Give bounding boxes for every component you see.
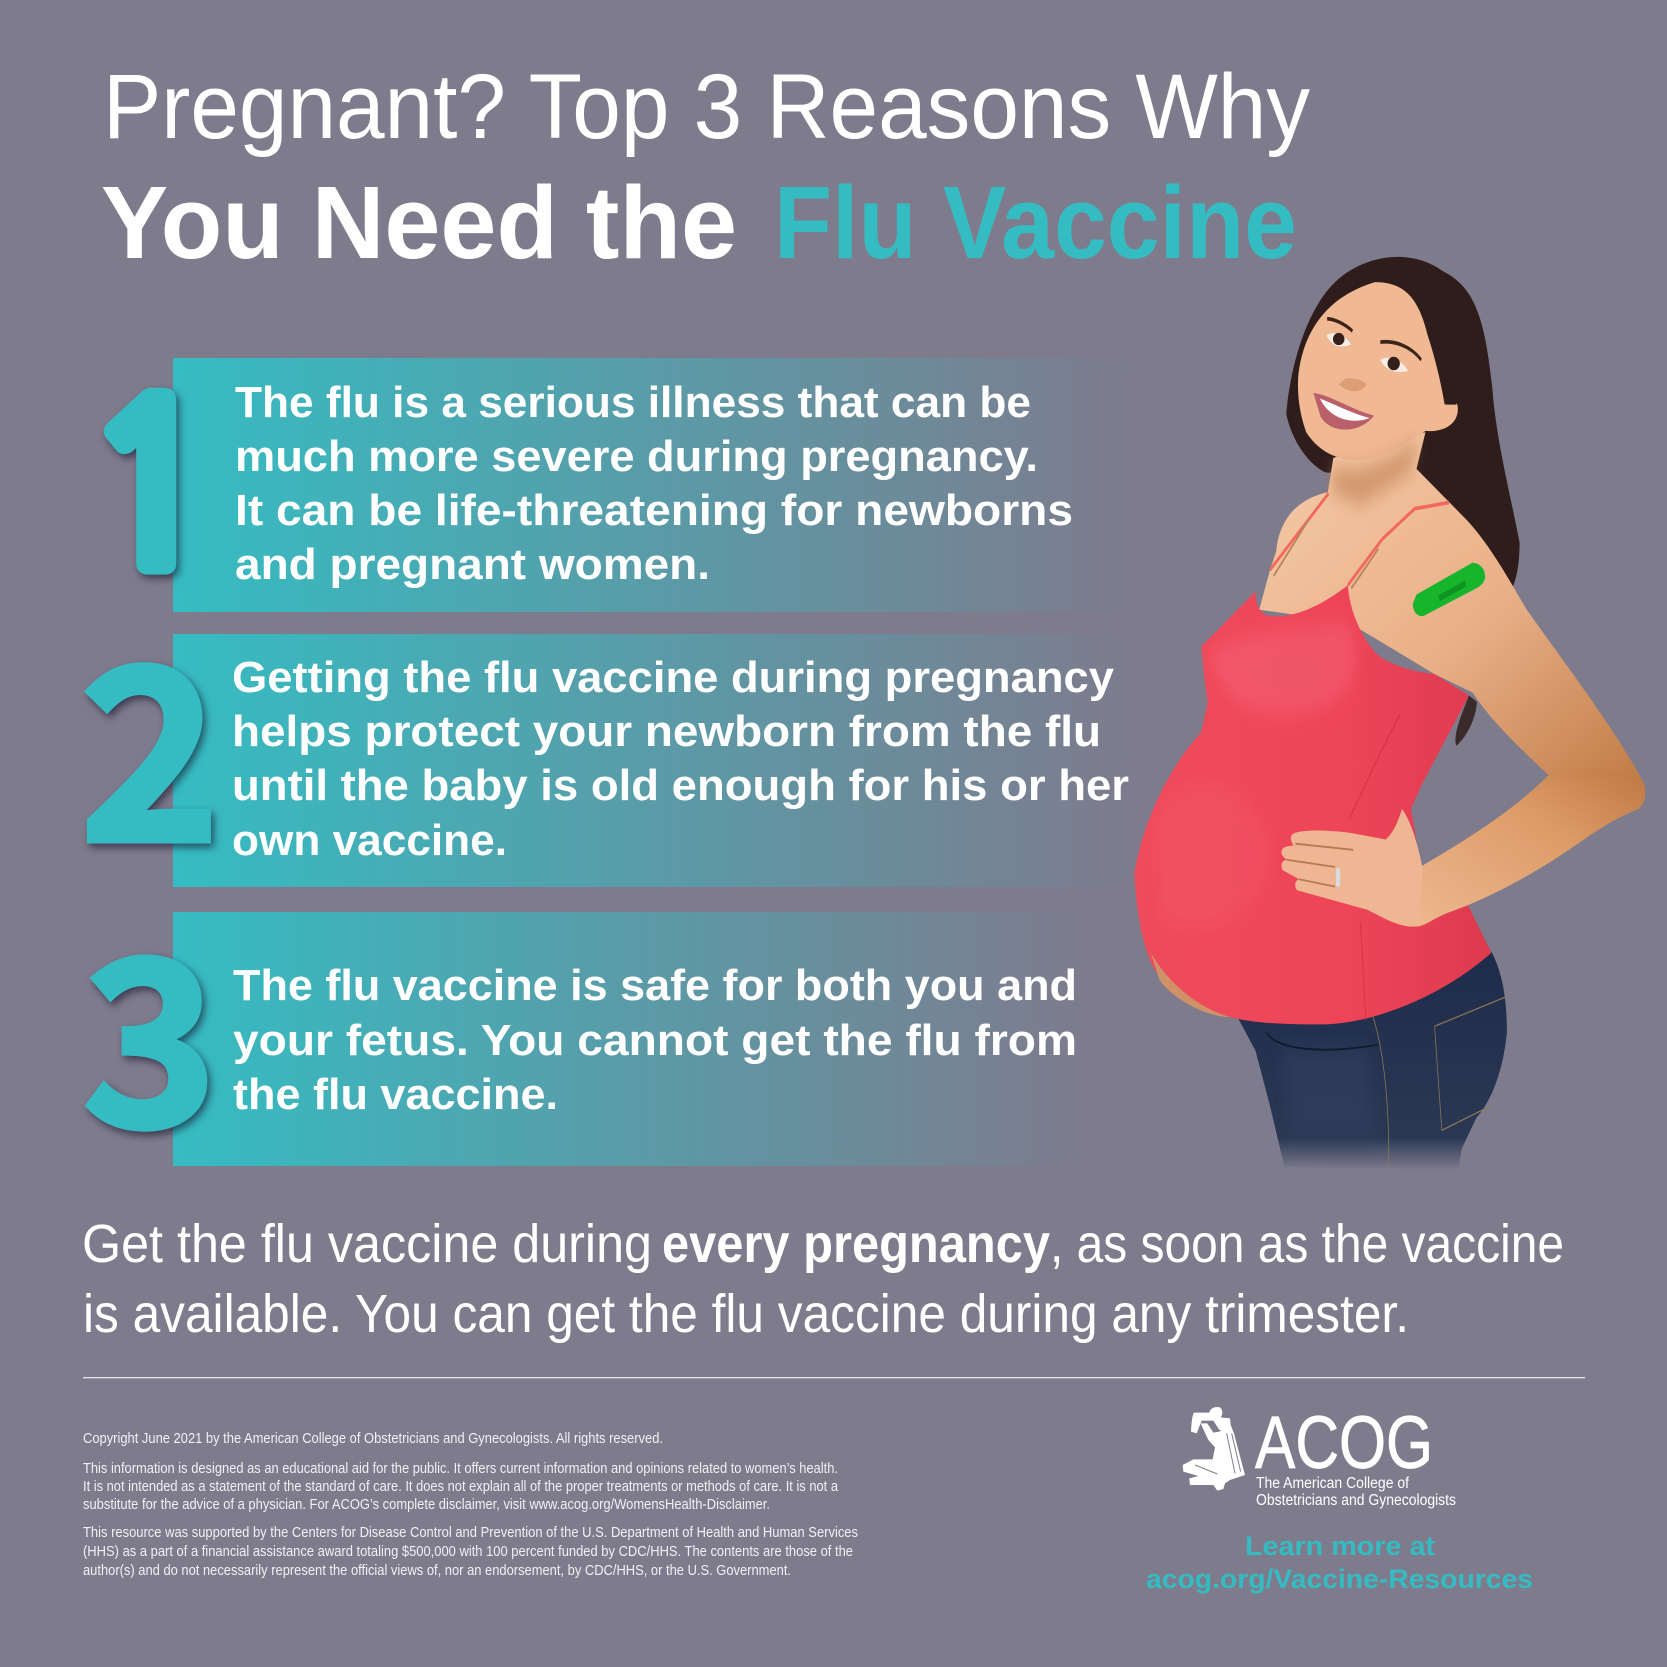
ring [1336,868,1340,887]
hand on hip [1281,809,1423,927]
reason 3 text: your fetus. You cannot get the flu from [233,1016,1077,1065]
closing message: every pregnancy [662,1214,1050,1274]
fingers [1286,844,1353,887]
call to action link: Learn more at [1245,1531,1435,1561]
bandage [1413,563,1485,616]
ACOG logo: ACOG [1255,1401,1433,1484]
call to action link [1146,1531,1533,1594]
title [101,56,1310,280]
panel: reason 1 [83,358,1135,612]
disclaimer text: Copyright June 2021 by the American College of Obstetricians and Gynecologists. All rights reserved. [83,1431,663,1447]
ACOG logo: Obstetricians and Gynecologists [1256,1492,1456,1509]
neck shade [1331,438,1418,506]
nose [1339,378,1367,391]
front hair [1415,285,1460,405]
disclaimer text: (HHS) as a part of a financial assistance award totaling $500,000 with 100 percent funded by CDC/HHS. The contents are those of the [83,1544,853,1560]
reason 2 text: Getting the flu vaccine during pregnancy [232,653,1115,702]
illustration: pregnant woman with bandage [1134,257,1645,1170]
forearm [1418,769,1645,926]
hand under belly [1151,953,1230,1017]
disclaimer text: It is not intended as a statement of the standard of care. It does not explain all of the proper treatments or methods of care. It is not a [83,1479,839,1495]
disclaimer text [83,1431,858,1579]
reason 3 text: the flu vaccine. [233,1070,558,1119]
title: You Need the [101,165,737,280]
disclaimer text: This resource was supported by the Centers for Disease Control and Prevention of the U.S. Department of Health and Human Services [83,1525,858,1541]
reason 1 text [235,378,1073,589]
numeral 1: 1 [83,377,219,600]
disclaimer text: author(s) and do not necessarily represent the official views of, nor an endorsement, by CDC/HHS, or the U.S. Government. [83,1563,791,1579]
ACOG logo: The American College of [1256,1475,1410,1492]
face [1298,282,1460,506]
reason 1 text: The flu is a serious illness that can be [235,378,1031,427]
panel: reason 3 [82,860,1088,1193]
numeral 3: 3 [82,860,218,1193]
panel: reason 2 [79,564,1135,911]
reason 1 text: It can be life-threatening for newborns [235,486,1073,535]
reason 3 text [233,961,1077,1119]
reason 1 text: much more severe during pregnancy. [235,432,1038,481]
reason 2 text: own vaccine. [232,816,507,865]
disclaimer text: This information is designed as an educational aid for the public. It offers current information and opinions related to women’s health. [83,1461,838,1477]
title: Pregnant? Top 3 Reasons Why [103,56,1310,158]
reason 3 text: The flu vaccine is safe for both you and [233,961,1077,1010]
reason 2 text: helps protect your newborn from the flu [232,707,1101,756]
reason 1 text: and pregnant women. [235,540,710,589]
call to action link: acog.org/Vaccine-Resources [1146,1564,1533,1594]
closing message: is available. You can get the flu vaccine during any trimester. [83,1284,1409,1344]
reason 2 text [232,653,1129,865]
title: Flu Vaccine [774,165,1297,280]
hair back [1286,257,1520,588]
reason 2 text: until the baby is old enough for his or her [232,761,1129,810]
disclaimer text: substitute for the advice of a physician. For ACOG’s complete disclaimer, visit www.acog.org/WomensHealth-Disclaimer. [83,1497,770,1513]
closing message [82,1214,1564,1344]
ACOG logo [1183,1401,1456,1509]
eyes and brows [1326,333,1408,372]
skin: shoulders, chest and upper arm [1259,432,1644,784]
mouth [1313,393,1374,430]
closing message: , as soon as the vaccine [1050,1214,1564,1274]
closing message: Get the flu vaccine during [82,1214,652,1274]
icon: mother lifting baby [1183,1407,1245,1491]
numeral 2: 2 [79,564,221,911]
jeans [1237,952,1507,1170]
red tank top [1134,493,1491,1024]
